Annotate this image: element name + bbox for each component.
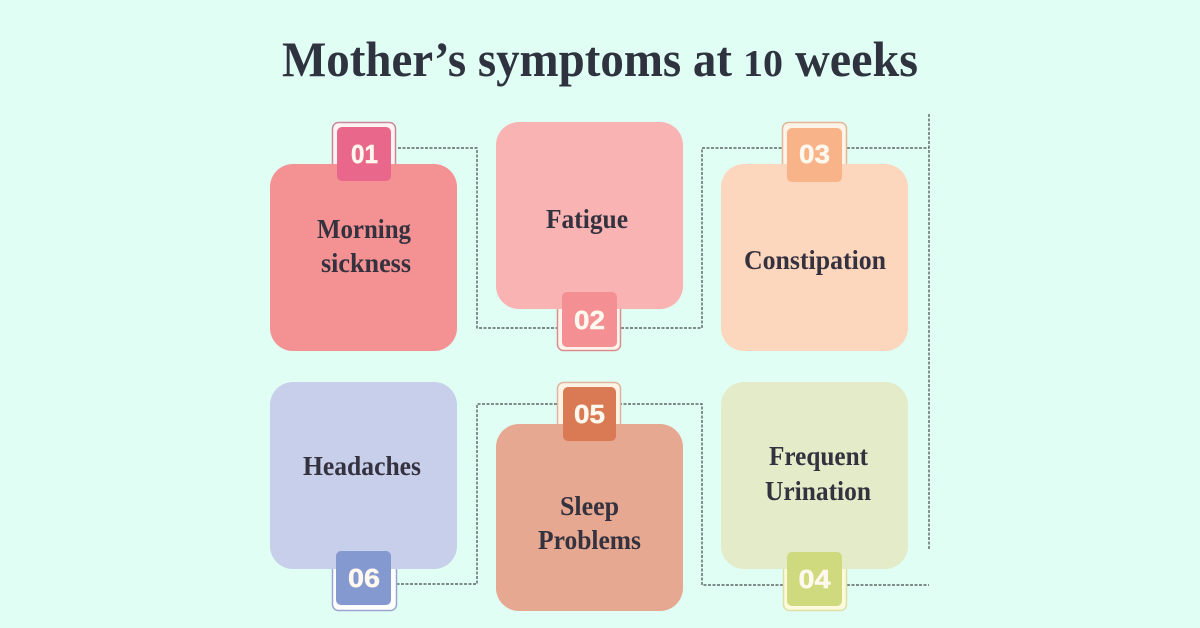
panel: 03 Constipation — [721, 122, 908, 351]
panel: 05 Sleep Problems: 05 — [574, 399, 605, 429]
panel: 06 Headaches — [270, 382, 457, 610]
panel: 04 Frequent Urination: Frequent — [769, 441, 868, 471]
connector lines — [396, 114, 929, 585]
panel: 04 Frequent Urination: Urination — [765, 476, 871, 506]
panel: 05 Sleep Problems — [496, 382, 683, 611]
panel: 04 Frequent Urination — [721, 382, 908, 610]
panel: 02 Fatigue: 02 — [574, 305, 605, 335]
panel: 02 Fatigue — [496, 122, 683, 350]
panel: 01 Morning sickness — [270, 122, 457, 351]
panel: 04 Frequent Urination: 04 — [798, 564, 831, 594]
panel: 06 Headaches: 06 — [348, 563, 380, 593]
panel: 05 Sleep Problems: Sleep — [560, 491, 619, 521]
title: weeks — [795, 31, 918, 87]
panel: 01 Morning sickness: Morning — [317, 214, 411, 244]
panel: 05 Sleep Problems: Problems — [538, 525, 641, 555]
panel: 06 Headaches: Headaches — [303, 451, 421, 481]
panel: 01 Morning sickness: 01 — [351, 139, 378, 169]
panel: 01 Morning sickness: sickness — [321, 248, 411, 278]
panel: 03 Constipation: Constipation — [744, 245, 886, 275]
panel: 03 Constipation: 03 — [799, 139, 830, 169]
title: 10 — [743, 43, 783, 85]
title: Mother’s symptoms at — [282, 31, 732, 87]
panel: 02 Fatigue: Fatigue — [546, 204, 628, 234]
